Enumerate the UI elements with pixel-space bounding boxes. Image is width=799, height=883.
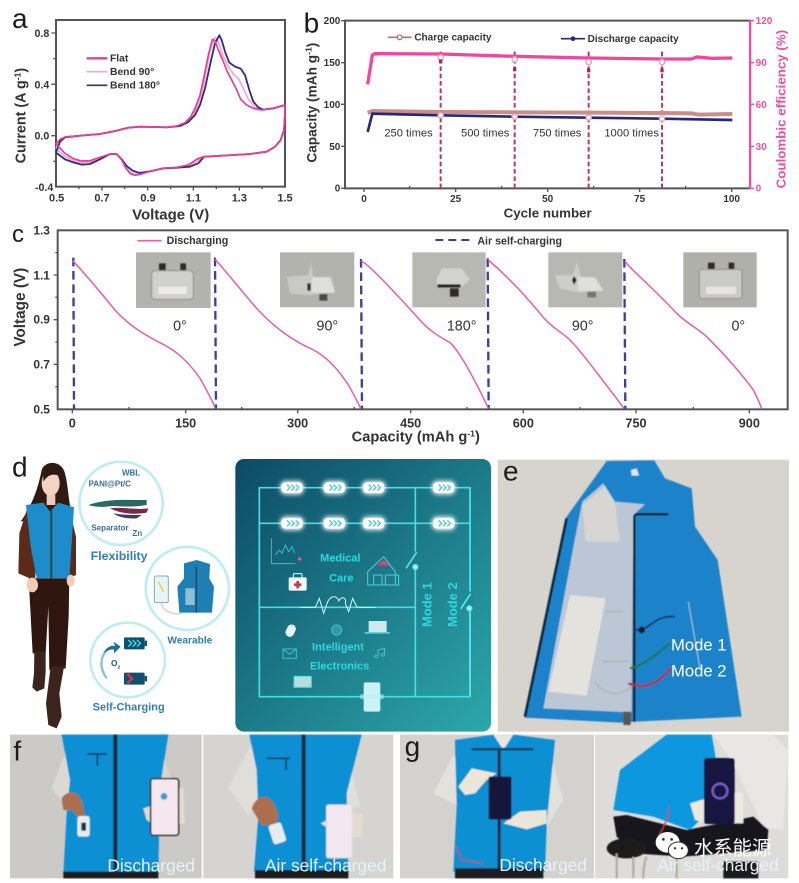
axis ticks c — [54, 253, 749, 413]
x tick labels b: 100 — [723, 194, 740, 205]
caption flexibility: Flexibility — [91, 549, 148, 563]
panel d: concept illustration — [12, 452, 229, 728]
y tick labels c — [33, 223, 50, 417]
angle labels: 90° — [316, 318, 338, 334]
right axis title b: Coulombic efficiency (%) — [774, 30, 789, 188]
left tick labels b: 0 — [335, 184, 341, 195]
caption f self-charged: Air self-charged — [265, 855, 386, 875]
x tick labels a: 0.9 — [140, 192, 156, 204]
x tick labels c: 900 — [739, 416, 760, 430]
x tick labels c: 0 — [69, 416, 76, 430]
circle: self-charging: 2 — [117, 664, 120, 670]
caption wearable: Wearable — [167, 635, 213, 646]
panel label c: c — [12, 221, 24, 248]
vest — [524, 460, 742, 725]
x tick labels a: 1.3 — [232, 192, 247, 204]
panel d: circuit board — [235, 459, 491, 732]
y tick labels a: 0.0 — [35, 131, 49, 143]
x tick labels a: 1.1 — [186, 192, 201, 204]
inset: 90 degree pouch — [280, 252, 354, 307]
circle: flexibility: Separator — [91, 523, 129, 532]
left tick labels b: 100 — [324, 100, 341, 111]
circuit labels: Intelligent — [312, 641, 364, 653]
x tick labels b: 25 — [450, 194, 462, 205]
x tick labels a: 0.7 — [94, 192, 110, 204]
x tick labels b: 75 — [634, 194, 646, 205]
angle labels: 0° — [173, 318, 187, 334]
x tick labels c: 600 — [513, 416, 534, 430]
cycle labels: 250 times — [384, 128, 433, 140]
inset: 90 degree pouch second — [548, 252, 622, 307]
panel label d: d — [12, 452, 28, 483]
plot frame b — [345, 21, 750, 188]
panel b: cycling — [304, 8, 789, 220]
y axis title b: -1 — [304, 47, 314, 55]
y tick labels c: 1.3 — [33, 223, 50, 237]
icon: medical kit — [289, 574, 307, 591]
x tick labels c — [69, 416, 760, 430]
panel f: pulse oximeter photos — [10, 735, 393, 878]
circuit labels — [310, 553, 369, 673]
circuit background — [235, 459, 491, 732]
right axis ticks b — [750, 21, 754, 188]
circle: flexibility — [79, 462, 163, 545]
legend a: Bend 180° — [110, 80, 160, 91]
curve bend 90 — [56, 37, 285, 175]
photo background — [498, 460, 789, 732]
watermark: 水系能源 — [694, 838, 771, 860]
y tick labels a: -0.4 — [35, 182, 53, 194]
caption g self-charged: Air self-charged — [657, 855, 779, 875]
icon: music — [375, 648, 385, 658]
discharge series — [368, 114, 732, 132]
legend c: Air self-charging — [477, 236, 562, 248]
circle: self-charging: O — [111, 658, 117, 668]
mode labels in photo: Mode 1 — [671, 635, 727, 654]
y tick labels a — [35, 28, 53, 194]
y axis title a: Current (A g — [13, 80, 29, 163]
inset: 0 degree pouch — [136, 252, 211, 308]
y tick labels a: 0.4 — [35, 79, 49, 91]
x tick labels c: 450 — [400, 416, 421, 430]
x tick labels a: 1.5 — [277, 192, 293, 204]
self-charging dashes — [73, 258, 625, 409]
photo g self-charged — [595, 735, 788, 878]
circuit lines — [259, 488, 470, 697]
discharge curves — [73, 259, 762, 409]
panel e: vest photo — [498, 455, 789, 732]
right tick labels b: 120 — [756, 16, 773, 27]
angle labels: 180° — [447, 318, 476, 334]
legend b: Charge capacity — [414, 32, 492, 43]
legend a — [87, 53, 160, 91]
caption self-charging: Self-Charging — [93, 702, 165, 714]
axis ticks b — [341, 21, 732, 192]
cycle labels: 750 times — [533, 128, 582, 140]
charge series — [368, 111, 732, 115]
y axis title a: ) — [13, 68, 29, 73]
photo f discharged — [10, 735, 202, 878]
caption f discharged: Discharged — [107, 855, 195, 875]
y axis title b: ) — [305, 43, 320, 47]
inset: 180 degree pouch — [412, 252, 486, 307]
icon: wechat bubbles — [656, 832, 688, 859]
x axis title c: Capacity (mAh g — [352, 430, 467, 446]
circuit labels: Electronics — [310, 661, 369, 673]
circle: flexibility: WBL — [122, 468, 140, 477]
legend a: Bend 90° — [110, 67, 154, 78]
angle labels: 90° — [572, 318, 593, 334]
mode labels in photo: Mode 2 — [671, 661, 727, 680]
plot frame c — [58, 230, 788, 409]
panel label g: g — [405, 731, 420, 762]
curve flat — [56, 39, 285, 175]
panel label f: f — [13, 736, 21, 767]
right tick labels b: 30 — [756, 142, 767, 153]
right tick labels b: 60 — [756, 100, 767, 111]
x tick labels c: 150 — [175, 416, 196, 430]
cycle labels: 1000 times — [604, 128, 659, 140]
legend c: Discharging — [167, 235, 228, 247]
left tick labels b — [324, 16, 341, 195]
x tick labels b: 50 — [542, 194, 554, 205]
cycle labels: 500 times — [461, 128, 510, 140]
circle: flexibility: PANI@Pt/C — [89, 480, 131, 489]
x tick labels b — [361, 194, 740, 205]
x tick labels a: 0.5 — [49, 192, 64, 204]
cycle dip points — [439, 59, 664, 72]
icon: ecg pulse — [300, 597, 375, 613]
x axis title a: Voltage (V) — [132, 206, 209, 223]
icon: health chart — [271, 538, 301, 564]
left tick labels b: 150 — [324, 58, 341, 69]
icon: hospital — [368, 557, 399, 585]
x axis title b: Cycle number — [504, 205, 592, 220]
circle: wearable — [146, 547, 229, 630]
right axis b — [746, 20, 753, 189]
y tick labels c: 0.9 — [33, 313, 50, 327]
efficiency series — [368, 54, 732, 84]
y axis title b: Capacity (mAh g — [305, 55, 320, 163]
icon: phone — [360, 682, 384, 712]
angle labels: 0° — [731, 318, 745, 334]
illustration: woman wearing vest — [18, 463, 76, 728]
panel c: self-charging under bending — [12, 221, 788, 446]
caption g discharged: Discharged — [499, 855, 587, 875]
panel a: CV curves — [12, 3, 293, 223]
photo g discharged — [400, 735, 594, 878]
right tick labels b: 0 — [756, 184, 762, 195]
icon: card — [294, 676, 311, 687]
legend b — [388, 32, 679, 45]
legend c — [137, 235, 562, 248]
panel label a: a — [12, 3, 28, 34]
icon: globe — [332, 625, 342, 635]
glowing battery cells — [280, 481, 455, 530]
cycle labels — [384, 128, 659, 140]
left tick labels b: 200 — [324, 16, 341, 27]
x tick labels c: 750 — [625, 416, 647, 430]
circuit labels: Medical — [320, 553, 360, 565]
panel g: phone charging photos — [400, 731, 788, 878]
legend b: Discharge capacity — [588, 34, 679, 45]
icon: laptop — [365, 621, 390, 634]
y axis title a: -1 — [12, 72, 22, 80]
icon: mouse — [284, 623, 297, 638]
photo f self-charged — [203, 735, 393, 878]
right tick labels b: 90 — [756, 58, 767, 69]
circuit labels: Care — [329, 572, 354, 584]
circle: self-charging — [90, 623, 165, 697]
x tick labels b: 0 — [361, 194, 367, 205]
mode labels in photo — [671, 635, 727, 680]
x axis title c: -1 — [467, 429, 475, 439]
y tick labels c: 0.7 — [33, 358, 50, 372]
axis ticks a — [51, 33, 262, 191]
plot frame a — [56, 20, 285, 187]
mode labels — [419, 582, 460, 627]
mode labels: Mode 2 — [445, 582, 460, 627]
cycle dips — [438, 55, 665, 121]
y axis title c: Voltage (V) — [12, 268, 29, 347]
mode labels: Mode 1 — [419, 582, 434, 627]
circle: flexibility: Zn — [132, 529, 142, 538]
switches — [406, 552, 475, 697]
x axis title c: ) — [475, 430, 480, 446]
left tick labels b: 50 — [329, 142, 341, 153]
inset: 0 degree pouch second — [683, 252, 757, 307]
icon: mail — [283, 649, 296, 658]
cycle markers — [441, 52, 662, 188]
x tick labels c: 300 — [287, 416, 308, 430]
angle labels — [173, 318, 745, 334]
y tick labels c: 0.5 — [33, 403, 50, 417]
panel label e: e — [503, 455, 519, 486]
curve bend 180 — [56, 35, 285, 173]
legend a: Flat — [110, 53, 129, 64]
x tick labels a — [49, 192, 293, 204]
y tick labels c: 1.1 — [33, 268, 50, 282]
panel label b: b — [304, 8, 319, 39]
right tick labels b — [756, 16, 773, 195]
y tick labels a: 0.8 — [35, 28, 49, 40]
